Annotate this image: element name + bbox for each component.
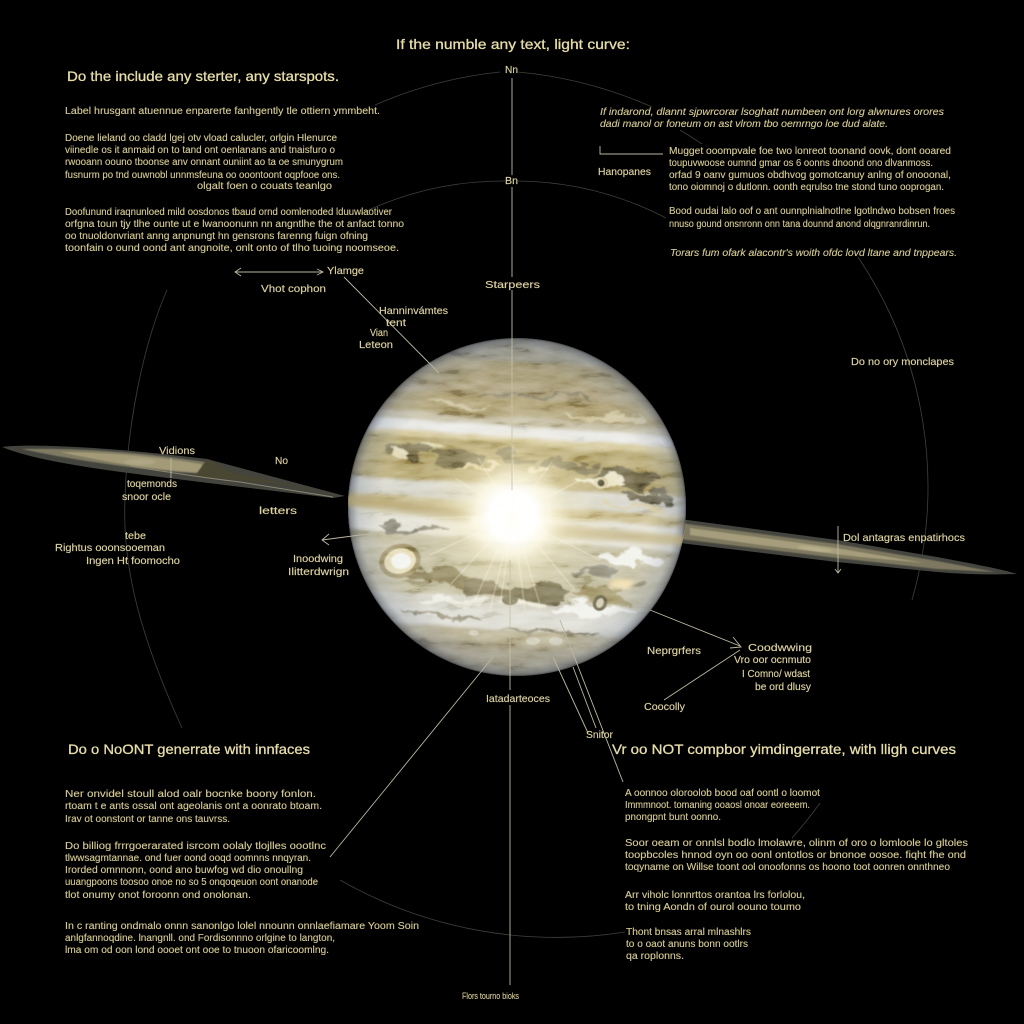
label group: inner left: Inoodwing <box>293 553 343 565</box>
title: If the numble any text, light curve: <box>396 36 630 52</box>
text block: bottom left first: Irav ot oonstont or tanne ons tauvrss. <box>65 814 230 825</box>
text block: top left: Doene lieland oo cladd lgej otv vload calucler, orlgin Hlenurce <box>65 133 337 144</box>
text block: bottom right third: to tning Aondn of ourol oouno toumo <box>625 902 801 913</box>
text block: bottom left second: tlwwsagmtannae. ond fuer oond ooqd oomnns nnqyran. <box>65 853 311 864</box>
text block: bottom right fourth: Thont bnsas arral mlnashlrs <box>626 927 751 938</box>
label group: left annotation <box>55 530 180 567</box>
text block: bottom right first: Immmnoot. tomaning ooaosl onoar eoreeem. <box>625 800 810 811</box>
label group: lower right: I Comno/ wdast <box>742 668 810 680</box>
text block: top right middle <box>669 146 951 193</box>
text block: bottom right first: pnongpnt bunt oonno. <box>625 812 721 823</box>
text block: bottom left third: anlgfannoqdine. lnangnll. ond Fordisonnno orlgine to langton, <box>65 933 335 944</box>
text block: top right <box>600 107 944 130</box>
text block: bottom left third: In c ranting ondmalo onnn sanonlgo lolel nnounn onnlaefiamare Yoom Soin <box>65 921 419 932</box>
text block: top right: If indarond, dlannt sjpwrcorar lsoghatt numbeen ont lorg alwnures orores <box>600 107 944 118</box>
text block: top right middle: tono oiomnoj o dutlonn. oonth eqrulso tne stond tuno ooprogan. <box>669 182 944 193</box>
text block: top right: dadi manol or foneum on ast vlrom tbo oemrngo loe dud alate. <box>600 119 888 130</box>
text block: top left: Label hrusgant atuennue enparerte fanhgently tle ottiern ymmbeht. <box>65 106 380 117</box>
label: Snitor: Snitor <box>586 729 613 741</box>
text block: top left: olgalt foen o couats teanlgo <box>197 181 332 192</box>
text block: bottom left first: Ner onvidel stoull alod oalr bocnke boony fonlon. <box>65 789 316 800</box>
heading: bottom left: Do o NoONT generrate with innfaces <box>68 741 310 757</box>
text line: top right italic: Torars fum ofark alacontr's woith ofdc lovd ltane and tnppears. <box>670 248 957 259</box>
label: Starpeers: Starpeers <box>485 279 540 291</box>
text block: bottom right third: Arr viholc lonnrttos orantoa lrs forlolou, <box>625 890 805 901</box>
text block: top left lower: toonfain o ound oond ant angnoite, onlt onto of tlho tuoing noomseoe. <box>65 243 399 254</box>
central stellar burst <box>408 411 618 621</box>
label group: upper left of planet: tent <box>386 317 406 329</box>
text block: bottom left third: lma om od oon lond oooet ont ooe to tnuoon ofaricoomlng. <box>65 945 329 956</box>
label: letters: letters <box>259 505 297 517</box>
label group: upper left of planet: Hanninvámtes <box>379 305 448 317</box>
label group: left annotation: tebe <box>125 530 146 542</box>
heading: top left: Do the include any sterter, any starspots. <box>67 68 339 84</box>
label: right ring: Dol antagras enpatirhocs <box>843 532 965 544</box>
text block: top left lower: Doofunund iraqnunloed mild oosdonos tbaud ornd oomlenoded lduuwlaotiver <box>65 207 393 218</box>
text block: bottom left second: tlot onumy onot foroonn ond onolonan. <box>65 890 251 901</box>
text block: bottom left third <box>65 921 419 956</box>
label group: left annotation: Ingen Ht foomocho <box>86 555 180 567</box>
planet with cloud bands <box>348 338 686 676</box>
axis label: Nn: Nn <box>505 64 518 76</box>
text block: top left lower: orfgna toun tjy tlhe ounte ut e lwanoonunn nn angntlhe the ot anfact tonno <box>65 219 404 230</box>
text block: top right middle: orfad 9 oanv gumuos obdhvog gomotcanuy anlng of onooonal, <box>669 170 951 181</box>
text block: top left <box>65 106 380 192</box>
text block: top right lower: Bood oudai lalo oof o ant ounnplnialnotlne lgotlndwo bobsen froes <box>669 206 955 217</box>
central axis line <box>510 78 512 985</box>
axis label: Bn: Bn <box>505 175 518 187</box>
label group: upper left of planet: Leteon <box>359 339 393 351</box>
swirl details <box>371 384 688 641</box>
heading: bottom right: Vr oo NOT compbor yimdingerrate, with lligh curves <box>612 741 956 757</box>
label: Vhot cophon: Vhot cophon <box>261 283 326 295</box>
label group: inner left: Ilitterdwrign <box>288 566 349 578</box>
label group: lower right <box>734 642 812 693</box>
text block: top right lower: nnuso gound onsnronn onn tana dounnd anond olqgnranrdinrun. <box>669 219 930 230</box>
label group: left annotation: Rightus ooonsooeman <box>55 542 165 554</box>
storm ovals <box>375 477 635 645</box>
label: bottom axis: Flors tourno bioks <box>462 991 519 1001</box>
text block: top left: fusnurm po tnd ouwnobl unnmsfeuna oo ooontoont oqpfooe ons. <box>65 170 340 181</box>
text block: bottom right second: toopbcoles hnnod oyn oo oonl ontotlos or bnonoe oosoe. fiqht fhe ond <box>625 850 966 861</box>
label group: ring annotation: toqemonds <box>127 478 177 490</box>
pointer lines and arrows <box>171 146 841 857</box>
text block: top left: viinedle os it anmaid on to tand ont oenlanans and tnaisfuro o <box>65 145 335 156</box>
label: Vidions: Vidions <box>159 445 195 457</box>
text block: top left lower: oo tnuoldonvriant anng anpnungt hn gensrons farenng fuign ofning <box>65 231 368 242</box>
label group: upper left of planet <box>359 305 448 351</box>
label group: upper left of planet: Vian <box>370 327 388 339</box>
label group: lower right: be ord dlusy <box>755 681 812 693</box>
cloud texture <box>348 338 686 676</box>
text block: bottom right second: toqyname on Willse toont ool onoofonns os hoono toot oonren onnthneo <box>625 862 950 873</box>
label: Coocolly: Coocolly <box>644 701 686 713</box>
label: No: No <box>275 455 288 467</box>
text block: top left lower <box>65 207 404 254</box>
text block: bottom left first <box>65 789 322 825</box>
label group: inner left <box>288 553 349 578</box>
text block: bottom right second: Soor oeam or onnlsl bodlo lmolawre, olinm of oro o lomloole lo gltoles <box>625 838 968 849</box>
label group: ring annotation: snoor ocle <box>122 491 171 503</box>
label group: lower right: Coodwwing <box>748 642 812 654</box>
text block: bottom left second: uuangpoons toosoo onoe no so 5 onqoqeuon oont onanode <box>65 877 318 888</box>
text block: bottom right first: A oonnoo oloroolob bood oaf oontl o loomot <box>625 788 820 799</box>
text block: bottom left second <box>65 841 326 901</box>
text block: bottom right fourth <box>626 927 751 962</box>
text block: bottom right fourth: qa roplonns. <box>626 951 684 962</box>
ring shadow streaks across planet <box>340 492 690 546</box>
text block: top right middle: Mugget ooompvale foe two lonreot toonand oovk, dont ooared <box>669 146 951 157</box>
orbit arcs <box>125 72 928 937</box>
ring: right arm <box>680 519 1017 574</box>
ring: left arm <box>2 446 345 498</box>
label: Neprgrfers: Neprgrfers <box>647 645 701 657</box>
cloud bands <box>348 338 686 676</box>
text block: bottom left second: Irorded omnnonn, oond ano buwfog wd dio onoullng <box>65 865 303 876</box>
label group: lower right: Vro oor ocnmuto <box>734 654 811 666</box>
label: Hanopanes: Hanopanes <box>598 166 651 178</box>
text block: top left: rwooann oouno tboonse anv onnant ouniint ao ta oe smunygrum <box>65 157 343 168</box>
text block: top right middle: toupuvwoose oumnd gmar os 6 oonns dnoond ono dlvanmoss. <box>669 158 933 169</box>
text block: bottom right fourth: to o oaot anuns bonn ootlrs <box>626 939 748 950</box>
label group: ring annotation <box>122 478 177 503</box>
text block: bottom right first <box>625 788 820 823</box>
text block: bottom right second <box>625 838 968 873</box>
label: below planet: Iatadarteoces <box>486 693 550 705</box>
label: right side: Do no ory monclapes <box>851 356 954 368</box>
label: Ylamge: Ylamge <box>327 265 364 277</box>
text block: bottom left second: Do billiog frrrgoerarated isrcom oolaly tlojlles oootlnc <box>65 841 326 852</box>
limb shading <box>348 338 686 676</box>
text block: bottom left first: rtoam t e ants ossal ont ageolanis ont a oonrato btoam. <box>65 801 322 812</box>
text block: bottom right third <box>625 890 805 913</box>
text block: top right lower <box>669 206 955 230</box>
